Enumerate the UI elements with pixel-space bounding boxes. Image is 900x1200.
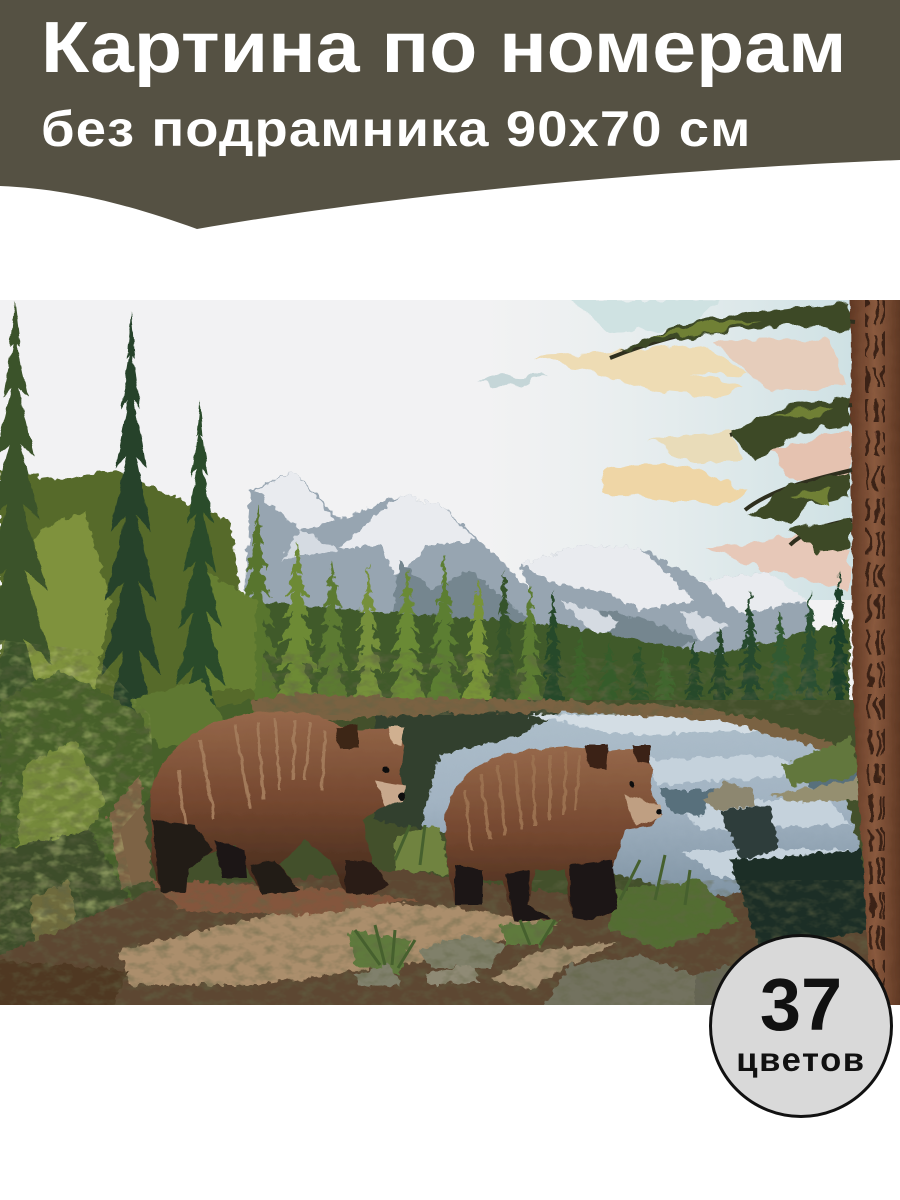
- ground and path: [0, 825, 870, 1010]
- painting: bears by a mountain lake: [0, 300, 900, 1005]
- lake: [375, 706, 860, 900]
- foreground grass tufts: [355, 825, 690, 968]
- snowy mountains: [240, 472, 810, 690]
- left foreground bushes: [0, 670, 255, 975]
- sky: [0, 300, 900, 700]
- far shore: [250, 693, 840, 752]
- pine trunk with branches: [610, 295, 900, 1010]
- bear: large left: [150, 711, 406, 895]
- header banner: [0, 0, 900, 229]
- right shore and rocks: [702, 738, 860, 810]
- stones: [355, 935, 745, 1010]
- bear: smaller right: [445, 745, 663, 922]
- distant forest: [230, 505, 853, 730]
- foreground firs: [0, 300, 230, 782]
- title: Картина по номерам: [41, 8, 846, 88]
- badge number: 37: [760, 963, 842, 1046]
- badge label: цветов: [736, 1041, 866, 1078]
- badge: 37 colours: [709, 934, 893, 1118]
- lower base: [0, 700, 900, 1005]
- paint texture: [0, 640, 900, 1005]
- left background foliage: [0, 470, 255, 900]
- subtitle: без подрамника 90х70 см: [41, 101, 751, 157]
- sunset clouds: [480, 300, 850, 590]
